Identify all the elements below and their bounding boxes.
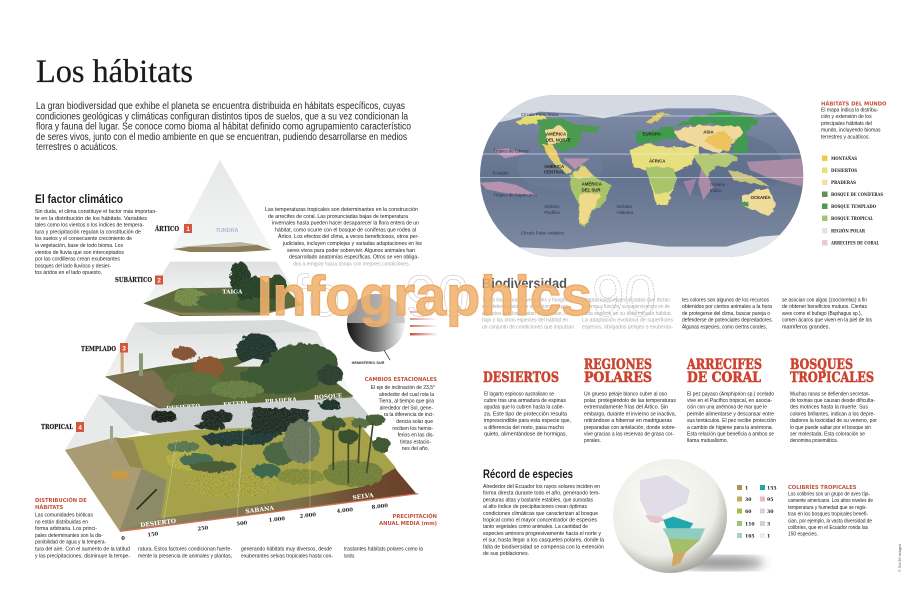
map labels: ÁFRICA <box>649 158 666 163</box>
text: el factor climático right: Las temperaturas tropicales son determinantes en la construcción <box>265 207 418 213</box>
section: desiertos: imprescindible para esta especie que, <box>484 418 571 424</box>
label: subártico 2: 2 <box>157 278 161 284</box>
callout: cambios estacionales: alrededor del cual rota la <box>379 392 434 398</box>
tier 3: temperate: BOSQUE <box>314 393 343 401</box>
precipitation axis scale: 150 <box>147 531 159 539</box>
section: arrecifes de coral: El pez payaso (Amphiprion sp.) ocelado <box>687 391 774 397</box>
text: biodiversidad columns: son determinantes de su entorno, cuyas <box>482 304 568 310</box>
label: templado 3: TEMPLADO <box>81 346 116 353</box>
tier 2: subarctic taiga <box>143 262 303 316</box>
axis caption: precipitación anual media: PRECIPITACIÓN <box>393 513 437 520</box>
precipitation axis scale: 500 <box>236 520 248 528</box>
callout: colibríes tropicales: colibríes, que en el Ecuador ronda las <box>788 525 868 531</box>
section: bosques tropicales: des motrices hasta la muerte. Sus <box>790 405 869 411</box>
text: el factor climático right: hábitat, como ocurre con el bosque de coníferas que rodea al <box>275 227 416 233</box>
label: tropical 4: 4 <box>78 424 82 432</box>
section: bosques tropicales: dadores la toxicidad de su veneno, por <box>790 418 877 424</box>
intro paragraph: de seres vivos, junto con el medio ambiente en que se encuentran, pudiendo desarrollarse en medios <box>36 132 407 143</box>
callout: distribución de hábitats: y las precipitaciones, disminuye la tempe- <box>35 553 130 559</box>
map sidebar: hábitats del mundo: principales hábitats del <box>821 121 872 127</box>
section: regiones polares: POLARES <box>584 370 652 386</box>
intro paragraph: flora y fauna del lugar. Se conoce como bioma al hábitat definido como agrupamiento característico <box>36 122 411 133</box>
tier 2: subarctic taiga: TAIGA <box>222 289 243 295</box>
callout: cambios estacionales: reciben los hemis- <box>392 426 433 432</box>
image credit: © Sol 90 Images <box>898 544 902 572</box>
callout: cambios estacionales: El eje de inclinación de 23,5° <box>371 385 435 391</box>
map labels: CENTRAL <box>544 169 565 174</box>
map legend: BOSQUE DE CONÍFERAS <box>831 191 884 198</box>
callout: distribución de hábitats: mente la presencia de animales y plantas, <box>138 553 232 559</box>
callout: cambios estacionales: nes del año. <box>402 446 429 452</box>
tier 4: tropical: SELVA <box>352 492 374 502</box>
section: regiones polares: vive gracias a las reservas de grasa cor- <box>584 432 674 438</box>
species legend: 60 <box>745 509 751 515</box>
text: récord de especies: tropical como el mayor concentrador de especies <box>483 518 598 524</box>
section: regiones polares: preparadas con antelación, donde sobre- <box>584 425 676 431</box>
map sidebar: hábitats del mundo: ción y extensión de los <box>821 114 872 120</box>
callout: distribución de hábitats: ponibilidad de agua y la tempera- <box>35 540 106 546</box>
polar regions and coral reefs <box>480 95 803 257</box>
world habitat map <box>480 95 803 257</box>
map labels: Atlántico <box>617 210 634 215</box>
text: el factor climático left: tura y precipitación regulan la constitución de <box>35 229 141 235</box>
callout: distribución de hábitats: generando hábitats muy diversos, desde <box>241 546 332 552</box>
section: bosques tropicales: denomina posemática. <box>790 438 838 444</box>
text: récord de especies: forma directa durante todo el año, generando tem- <box>483 491 600 497</box>
map labels: AMÉRICA <box>582 182 603 187</box>
map labels: AMÉRICA <box>544 164 565 169</box>
callout: distribución de hábitats: tura del aire. Con el aumento de la latitud <box>35 546 130 552</box>
callout: distribución de hábitats: no están distribuidas en <box>35 519 88 525</box>
intro paragraph <box>36 101 411 153</box>
section: bosques tropicales: Muchas ranas se defienden secretan- <box>790 391 870 397</box>
tier 4: tropical: SABANA <box>245 505 275 515</box>
map labels: Océano <box>544 204 560 209</box>
callout: cambios estacionales: alrededor del Sol, gene- <box>380 405 433 411</box>
section: arrecifes de coral: DE CORAL <box>687 370 761 386</box>
continents <box>515 112 777 227</box>
text: el factor climático left: vientos de lluvia que son interceptados <box>35 250 125 256</box>
text: biodiversidad columns: de protegerse del clima, buscar pareja o <box>682 311 770 317</box>
text: récord de especies: al alto índice de precipitaciones crean óptimas <box>483 504 588 510</box>
section: regiones polares: polar, protegiéndolo de las temperaturas <box>584 398 676 404</box>
section: regiones polares: extremadamente frías del Ártico. Sin <box>584 404 668 411</box>
section: bosques tropicales <box>790 357 877 444</box>
text: récord de especies <box>483 484 604 557</box>
map labels: AMÉRICA <box>546 132 567 137</box>
tier 3: temperate: ESTEPA <box>223 401 249 409</box>
text: biodiversidad columns: defenderse de potenciales depredadores. <box>682 318 773 324</box>
section: regiones polares: Un grueso pelaje blanco cubre al oso <box>584 391 667 397</box>
section: bosques tropicales: ser molestada. Esta coloración se <box>790 432 865 438</box>
species legend: 1 <box>767 534 770 540</box>
map legend: PRADERAS <box>831 180 857 186</box>
text: récord de especies: el sur, hasta llegar a los casquetes polares, donde la <box>483 538 604 544</box>
precipitation axis scale: 2.000 <box>300 512 317 520</box>
earth tilt diagram <box>347 294 438 365</box>
watermark: Infographics <box>257 264 592 327</box>
text: biodiversidad columns: un conjunto de condiciones que impulsan <box>482 324 574 330</box>
text: el factor climático right: desarrollado anatomías específicas. Otros se ven obliga- <box>289 255 419 261</box>
map labels: Círculo Polar Ártico <box>521 112 559 117</box>
heading: el factor climático: El factor climático <box>35 192 123 206</box>
text: biodiversidad columns: de obtener beneficios mutuos. Ciertas <box>782 304 867 310</box>
species legend: 3 <box>767 522 770 528</box>
map legend: ARRECIFES DE CORAL <box>830 240 880 246</box>
precipitation axis scale: 250 <box>197 525 209 533</box>
map legend: MONTAÑAS <box>831 155 858 162</box>
section: arrecifes de coral: sus tentáculos. El pez recibe protección <box>687 418 776 424</box>
callout: cambios estacionales: ferios en las dis- <box>398 433 434 439</box>
precipitation axis scale: 0 <box>121 536 125 542</box>
species legend: 30 <box>767 509 773 515</box>
map labels: Océano <box>617 204 632 209</box>
map labels: OCEANÍA <box>751 195 771 200</box>
axis caption: precipitación anual media <box>379 513 437 527</box>
tier 1: arctic tundra <box>172 160 272 252</box>
precipitation axis scale: 1.000 <box>269 516 286 524</box>
tier 3: temperate: DESIERTO <box>166 404 200 412</box>
text: el factor climático right: seres vivos para poder sobrevivir. Algunos animales han <box>287 248 415 254</box>
earth tilt diagram: HEMISFERIO SUR <box>352 361 385 365</box>
text: el factor climático right <box>265 207 423 267</box>
callout: colibríes tropicales: camente americano. Los altos niveles de <box>788 498 873 504</box>
text: récord de especies: falta de biodiversidad se compensa con la extensión <box>483 544 604 550</box>
label: templado 3: 3 <box>122 346 126 352</box>
heading: biodiversidad: Biodiversidad <box>482 275 567 291</box>
text: biodiversidad columns: Todos los animales, vegetales y hongos <box>482 298 568 304</box>
text: récord de especies: peraturas altas y bastante estables, que sumadas <box>483 497 593 503</box>
callout: cambios estacionales <box>365 377 437 452</box>
label: tropical 4 <box>41 422 84 432</box>
watermark: fo <box>292 264 340 329</box>
section: desiertos: agudas que lo cubren hasta la cabe- <box>484 405 564 411</box>
text: biodiversidad columns <box>482 298 872 330</box>
callout: colibríes tropicales: temperatura y humedad que se regis- <box>788 505 867 511</box>
callout: distribución de hábitats: forma arbitraria. Los princi- <box>35 526 97 532</box>
species globe <box>613 459 764 573</box>
text: el factor climático left <box>35 209 157 276</box>
section: bosques tropicales: TROPICALES <box>790 370 874 386</box>
text: biodiversidad columns: obtenidos por ciertos animales a la hora <box>682 304 772 310</box>
section: desiertos <box>483 370 571 438</box>
map labels: Océano <box>710 182 726 187</box>
callout: distribución de hábitats: Las comunidades bióticas <box>35 512 93 518</box>
section: bosques tropicales: BOSQUES <box>790 357 853 373</box>
text: el factor climático left: los suelos y el consecuente crecimiento de <box>35 236 132 242</box>
precipitation axis scale <box>121 503 389 542</box>
precipitation axis scale: 8.000 <box>372 503 389 511</box>
callout: colibríes tropicales: cian, por ejemplo, la vasta diversidad de <box>788 518 872 524</box>
map labels: DEL SUR <box>582 187 601 192</box>
text: biodiversidad columns: mamíferos grandes. <box>782 324 830 330</box>
map labels: EUROPA <box>643 132 662 137</box>
text: biodiversidad columns: cada especie en su determinado hábitat. <box>582 311 672 317</box>
title: Los hábitats <box>36 54 193 90</box>
species legend: 165 <box>745 534 755 540</box>
text: el factor climático left: tos áridos en el lado opuesto. <box>35 270 102 276</box>
tier 4: tropical <box>65 394 418 532</box>
axis caption: precipitación anual media: ANUAL MEDIA (mm) <box>379 521 437 527</box>
text: biodiversidad columns: bajo y las otras especies del hábitat en <box>482 318 568 324</box>
section: desiertos: a diferencia del resto, pasa mucho <box>484 425 564 431</box>
callout: colibríes tropicales: 150 especies. <box>788 532 818 538</box>
callout: cambios estacionales: tintas estacio- <box>400 439 431 445</box>
map labels: Trópico de Capricornio <box>493 193 538 198</box>
label: tropical 4: TROPICAL <box>41 424 74 431</box>
map legend: DESIERTOS <box>831 168 858 174</box>
text: el factor climático left: tales como los vientos o los índices de tempera- <box>35 223 144 229</box>
text: el factor climático right: Ártico. Los efectos del clima, a veces beneficiosos, otros per- <box>278 233 419 240</box>
label: templado 3 <box>81 343 128 353</box>
section: bosques tropicales: do toxinas que causan desde dificulta- <box>790 398 875 404</box>
species legend: 1 <box>745 486 748 492</box>
text: récord de especies: especies aminora progresivamente hacia el norte y <box>483 531 602 537</box>
section: desiertos: za. Este tipo de protección resulta <box>484 411 567 417</box>
text: biodiversidad columns: se asocian con algas (zooclorelas) a fin <box>782 298 867 304</box>
map legend <box>822 155 884 246</box>
section: arrecifes de coral: a cambio de higiene para la anémona. <box>687 425 773 431</box>
section: regiones polares <box>584 357 676 444</box>
label: ártico 1 <box>154 224 192 233</box>
text: biodiversidad columns: tes colores son algunos de los recursos <box>682 298 769 304</box>
map sidebar: hábitats del mundo: mundo, incluyendo biomas <box>821 128 881 134</box>
text: récord de especies: Alrededor del Ecuador los rayos solares inciden en <box>483 484 600 490</box>
callout: distribución de hábitats: pales determinantes son la dis- <box>35 533 103 539</box>
section: bosques tropicales: colores brillantes, indican a los depre- <box>790 411 875 417</box>
map legend: BOSQUE TROPICAL <box>831 216 874 222</box>
text: biodiversidad columns: Algunas especies, como ciertos corales, <box>682 324 767 330</box>
map labels: Ecuador <box>493 171 509 176</box>
tier 4: tropical: DESIERTO <box>140 518 176 529</box>
watermark: 90 <box>592 264 657 329</box>
callout: distribución de hábitats: ratura. Estos factores condicionan fuerte- <box>138 546 232 552</box>
text: el factor climático left: la vegetación, base de todo bioma. Los <box>35 243 123 249</box>
species legend: 95 <box>767 497 773 503</box>
map labels <box>493 112 771 236</box>
map legend: BOSQUE TEMPLADO <box>831 204 876 210</box>
watermark: 90 <box>405 264 470 329</box>
callout: distribución de hábitats: tundra. <box>344 553 355 559</box>
map sidebar: hábitats del mundo: El mapa indica la distribu- <box>821 108 879 114</box>
tier 3: temperate <box>105 320 353 413</box>
section: arrecifes de coral: llama mutualismo. <box>687 438 728 444</box>
callout: distribución de hábitats: HÁBITATS <box>35 504 64 511</box>
section: bosques tropicales: lo que puede saltar por el bosque sin <box>790 425 871 431</box>
section: arrecifes de coral <box>686 357 776 444</box>
section: regiones polares: porales. <box>584 438 601 444</box>
intro paragraph: La gran biodiversidad que exhibe el planeta se encuentra distribuida en hábitats específicos, cuyas <box>36 101 405 112</box>
pyramid diagram of climate tiers <box>65 160 418 532</box>
species legend: 30 <box>745 497 751 503</box>
section: regiones polares: retirándose a hibernar en madrigueras <box>584 418 673 424</box>
intro paragraph: terrestres o acuáticos. <box>36 142 118 153</box>
callout: cambios estacionales: ra la diferencia de inci- <box>384 412 434 418</box>
callout: colibríes tropicales: COLIBRÍES TROPICALES <box>788 483 857 491</box>
map labels: Pacífico <box>544 210 560 215</box>
callout: colibríes tropicales: tran en los bosques tropicales benefi- <box>788 512 868 518</box>
map labels: Índico <box>710 188 722 193</box>
text: el factor climático right: invernales hasta pueden hacer desaparecer la flora entera de un <box>272 221 419 227</box>
text: récord de especies: condiciones climáticas que caracterizan al bosque <box>483 511 598 517</box>
text: el factor climático left: bosques del lado lluvioso y desier- <box>35 263 111 269</box>
map sidebar: hábitats del mundo <box>821 100 887 140</box>
species legend: 155 <box>767 486 777 492</box>
section: desiertos: El lagarto espinoso australiano se <box>484 391 554 397</box>
map labels: Círculo Polar Antártico <box>521 231 565 236</box>
callout: distribución de hábitats: exuberantes selvas tropicales hasta con- <box>241 553 333 559</box>
section: desiertos: DESIERTOS <box>483 370 559 386</box>
callout: colibríes tropicales <box>788 483 873 538</box>
text: el factor climático left: te en la distribución de los hábitats. Variables <box>35 216 148 222</box>
text: el factor climático left: Sin duda, el clima constituye el factor más importan- <box>35 209 157 215</box>
text: biodiversidad columns: La adaptación evolutiva de superficies <box>582 318 674 324</box>
callout: distribución de hábitats: DISTRIBUCIÓN DE <box>35 497 87 504</box>
section: arrecifes de coral: permite alimentarse y descansar entre <box>687 411 774 417</box>
text: el factor climático right: de arrecifes de coral. Las pronunciadas bajas de temperatura <box>268 214 408 220</box>
section: desiertos: quieto, alimentándose de hormigas. <box>484 432 567 438</box>
callout: cambios estacionales: CAMBIOS ESTACIONALES <box>365 377 437 383</box>
text: el factor climático right: dos a emigrar hacia zonas con mejores condiciones. <box>293 261 410 267</box>
tier 1: arctic tundra: TUNDRA <box>216 228 238 234</box>
section: regiones polares: REGIONES <box>584 357 652 373</box>
species legend: 110 <box>745 522 755 528</box>
precipitation axis scale: 4.000 <box>337 507 354 515</box>
section: arrecifes de coral: ción con una anémona de mar que le <box>687 405 767 411</box>
map graticule <box>480 116 803 177</box>
section: arrecifes de coral: vive en el Pacífico tropical, en asocia- <box>687 398 772 404</box>
text: el factor climático right: judiciales, incluyen complejas y variadas adaptaciones en los <box>282 241 423 247</box>
text: biodiversidad columns: comen ácaros que viven en la piel de los <box>782 318 872 324</box>
map sidebar: hábitats del mundo: terrestres y acuáticos. <box>821 134 870 140</box>
callout: cambios estacionales: Tierra, al tiempo que gira <box>379 399 434 405</box>
section: arrecifes de coral: ARRECIFES <box>686 357 762 373</box>
label: subártico 2 <box>115 276 163 284</box>
label: ártico 1: 1 <box>186 226 190 233</box>
tier 3: temperate: PRADERA <box>265 397 298 405</box>
text: biodiversidad columns: aves como el bufago (Buphagus sp.), <box>782 311 862 317</box>
text: el factor climático left: por las cordilleras crean exuberantes <box>35 257 121 263</box>
section: arrecifes de coral: Esta relación que beneficia a ambos se <box>687 432 774 438</box>
section: desiertos: cubre tras una armadura de espinas <box>484 398 567 404</box>
label: ártico 1: ÁRTICO <box>154 226 179 233</box>
callout: colibríes tropicales: Los colibríes son un grupo de aves típi- <box>788 492 870 498</box>
text: récord de especies: de sus poblaciones. <box>483 551 529 557</box>
map legend: REGIÓN POLAR <box>831 226 865 234</box>
map sidebar: hábitats del mundo: HÁBITATS DEL MUNDO <box>821 100 887 108</box>
map labels: ASIA <box>703 129 715 134</box>
label: subártico 2: SUBÁRTICO <box>115 277 152 284</box>
callout: cambios estacionales: dencia solar que <box>396 419 433 425</box>
heading: récord de especies: Récord de especies <box>483 467 573 481</box>
text: biodiversidad columns: la forma y función, su supervivencia en de <box>582 304 670 310</box>
text: biodiversidad columns: adaptaciones especializadas que dictan <box>582 298 670 304</box>
callout: distribución de hábitats: trastantes hábitats polares como la <box>344 546 423 552</box>
text: récord de especies: tanto vegetales como animales. La cantidad de <box>483 524 588 530</box>
map labels: DEL NORTE <box>546 137 571 142</box>
text: biodiversidad columns: espesos, abrigados pelajes o exuberan- <box>582 324 673 330</box>
callout: distribución de hábitats <box>35 497 423 559</box>
intro paragraph: condiciones geológicas y climáticas configuran distintos tipos de suelos, que a su vez condicionan la <box>36 112 409 122</box>
species legend <box>737 485 777 540</box>
section: regiones polares: embargo, durante el invierno se inactiva, <box>584 411 676 417</box>
text: biodiversidad columns: especies que los habitan desarrollan, el <box>482 311 568 317</box>
map labels: Trópico de Cáncer <box>493 149 529 154</box>
